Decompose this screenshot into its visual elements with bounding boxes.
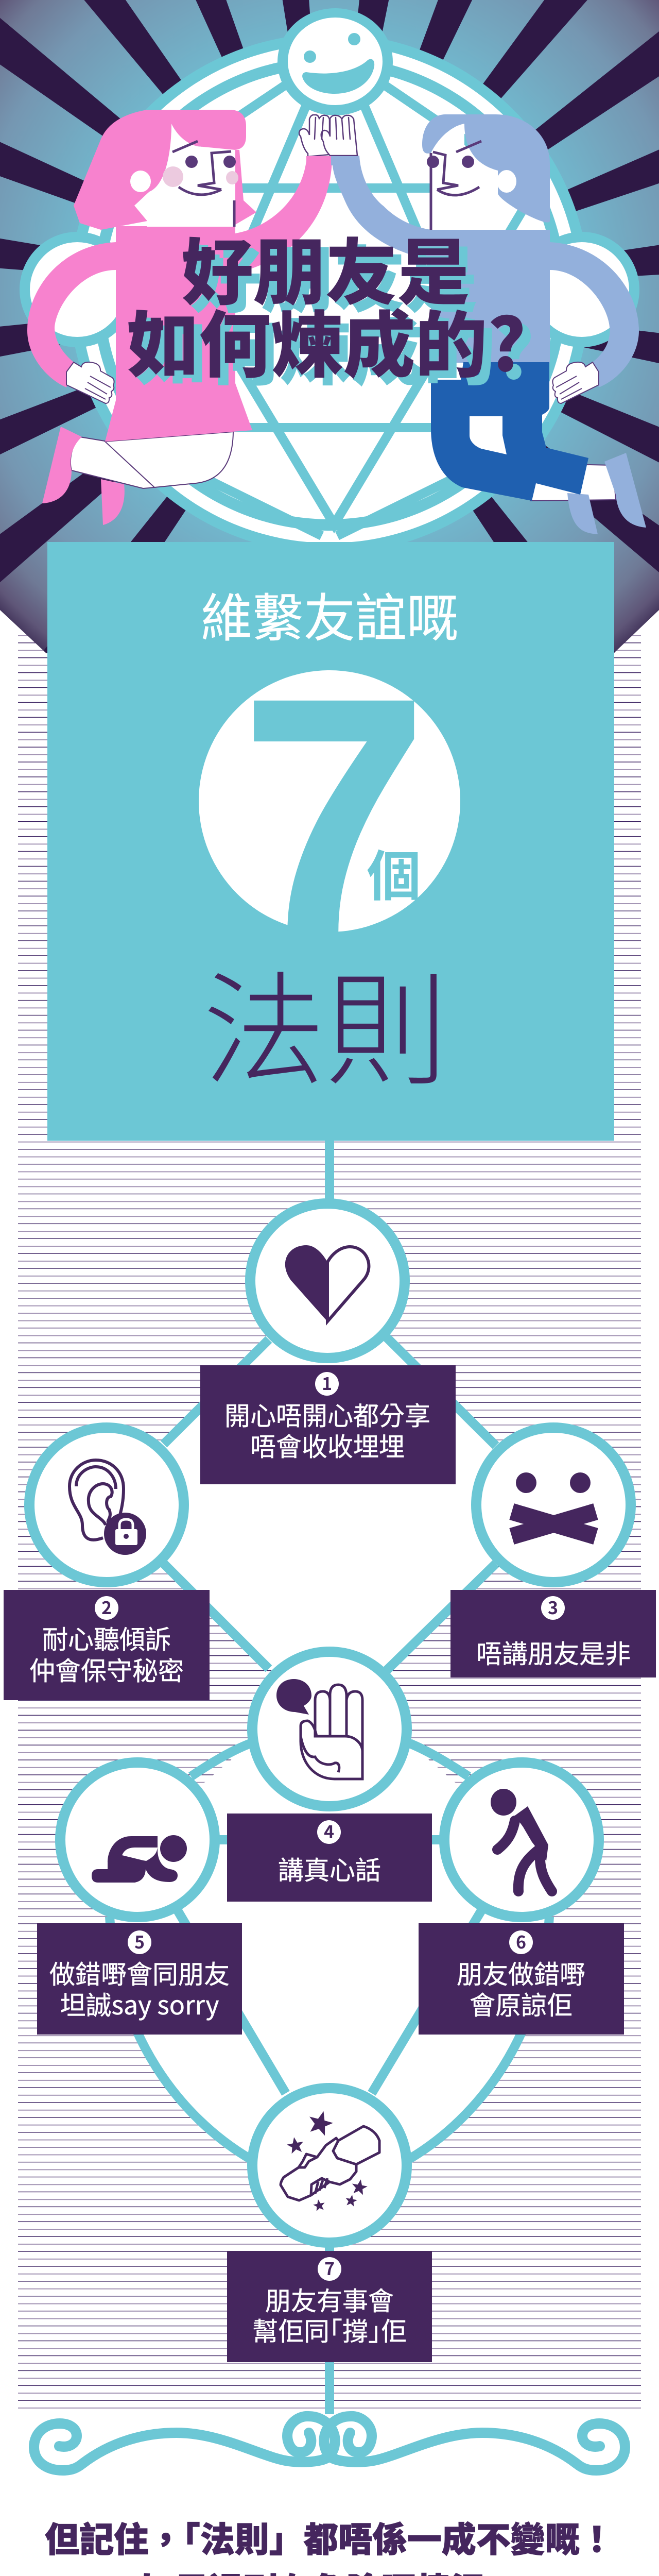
hair xyxy=(422,114,550,223)
hand xyxy=(66,362,114,403)
label 3: 唔講朋友是非 xyxy=(476,1634,631,1671)
icon: helping hands and stars xyxy=(281,2108,379,2212)
eyes xyxy=(427,156,439,168)
label 1: 唔會收收埋埋 xyxy=(250,1427,405,1464)
label 1: 1 xyxy=(322,1370,332,1395)
label 5: 做錯嘢會同朋友 xyxy=(49,1954,230,1991)
smiley head xyxy=(278,8,393,115)
label 6: 朋友做錯嘢 xyxy=(457,1954,585,1991)
icon: half heart xyxy=(285,1245,369,1321)
panel heading: 維繫友誼嘅 xyxy=(201,577,458,651)
magic circle rings xyxy=(20,33,639,554)
title: 好朋友是 xyxy=(181,215,470,319)
brow, nose, mouth xyxy=(172,141,234,227)
label 6: 會原諒佢 xyxy=(470,1985,573,2022)
icon: taped mouth xyxy=(512,1472,596,1536)
legs xyxy=(71,437,192,488)
sunburst rays xyxy=(0,0,659,725)
raised arm xyxy=(332,156,431,260)
label 1: 開心唔開心都分享 xyxy=(224,1396,430,1433)
rule 6: bent person circle xyxy=(444,1762,599,1917)
label 2: 2 xyxy=(101,1594,112,1619)
big seven in circle: 7 xyxy=(241,630,427,1004)
label 4: 4 xyxy=(324,1818,334,1843)
label 2: 耐心聽傾訴 xyxy=(42,1619,171,1656)
eyes xyxy=(185,156,198,168)
label 2: 仲會保守秘密 xyxy=(29,1651,184,1688)
character: pink girl xyxy=(27,110,332,525)
boots xyxy=(42,427,82,503)
brow, nose, mouth xyxy=(431,141,481,230)
label 3: 3 xyxy=(548,1594,558,1619)
rule 4: hand circle xyxy=(252,1652,407,1806)
face xyxy=(134,124,235,227)
jeans gap xyxy=(470,416,507,454)
label 5 xyxy=(37,1923,242,2035)
label 4: 講真心話 xyxy=(278,1850,381,1887)
label 7: 幫佢同「撐」佢 xyxy=(252,2311,407,2348)
jeans xyxy=(431,362,588,501)
icon: kneeling person xyxy=(92,1835,187,1883)
label 5: 坦誠say sorry xyxy=(60,1985,219,2022)
hair xyxy=(74,110,256,230)
label 6: 6 xyxy=(516,1928,526,1954)
hero background xyxy=(0,0,659,725)
body dress xyxy=(105,226,252,442)
high five hands xyxy=(299,115,359,165)
cheeks xyxy=(163,166,183,187)
side arm xyxy=(550,242,639,387)
side arm xyxy=(27,242,116,387)
lower leg xyxy=(530,464,616,501)
label 5: 5 xyxy=(134,1928,145,1954)
rule 3: taped mouth circle xyxy=(476,1428,631,1582)
label 7: 7 xyxy=(324,2255,335,2280)
rules heading: 法則 xyxy=(203,932,448,1110)
icon: ear with padlock xyxy=(70,1460,146,1555)
title xyxy=(127,215,531,392)
title: 如何煉成的? xyxy=(127,288,526,392)
hexagram lines xyxy=(132,37,536,536)
face xyxy=(431,124,498,230)
label 1 xyxy=(200,1365,456,1484)
label 3 xyxy=(450,1590,656,1677)
label 7 xyxy=(227,2251,432,2362)
big seven in circle: 個 xyxy=(367,833,421,911)
ornament: top flourish xyxy=(34,2416,625,2470)
rule 2: ear circle xyxy=(29,1428,184,1582)
body xyxy=(431,230,550,363)
raised arm xyxy=(235,156,332,273)
label 7: 朋友有事會 xyxy=(265,2281,394,2318)
character: blue boy xyxy=(332,114,646,534)
rule 1: heart circle xyxy=(250,1204,405,1358)
icon: oath hand and bubble xyxy=(276,1679,362,1779)
ear xyxy=(130,171,151,192)
shoes xyxy=(604,453,646,528)
network connectors xyxy=(107,1141,553,2414)
label 2 xyxy=(4,1590,210,1700)
rule 5: kneeling circle xyxy=(60,1762,215,1917)
label 4 xyxy=(227,1814,432,1902)
rule 7: helping hands circle xyxy=(252,2088,407,2243)
striped background xyxy=(18,635,641,2410)
closing message: 但記住，「法則」都唔係一成不變嘅！ xyxy=(45,2512,614,2562)
icon: bent walking person xyxy=(491,1789,552,1891)
ear xyxy=(497,170,516,193)
teal panel xyxy=(47,542,614,1141)
hand xyxy=(552,362,599,403)
label 6 xyxy=(419,1923,624,2035)
